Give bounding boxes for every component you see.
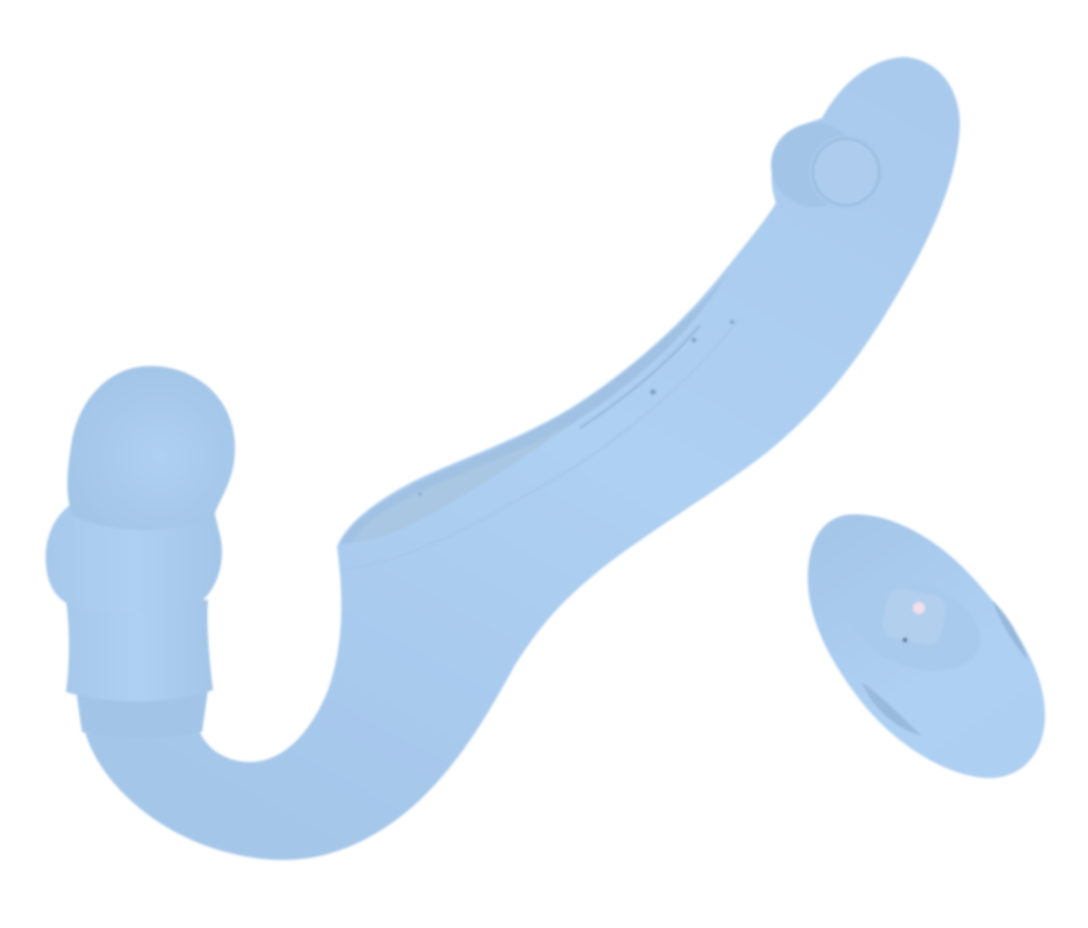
main body bbox=[85, 57, 960, 860]
ring bbox=[46, 500, 222, 614]
seam line bbox=[340, 320, 738, 570]
remote side grooves bbox=[992, 600, 1028, 660]
control dots bbox=[418, 320, 734, 496]
top channel bbox=[340, 272, 728, 545]
collar bbox=[76, 690, 208, 738]
button housing bbox=[771, 123, 859, 207]
cylinder bbox=[66, 600, 213, 702]
remote bbox=[808, 514, 1045, 778]
bulb attachment bbox=[46, 366, 235, 738]
remote button bbox=[880, 586, 949, 648]
remote dome bbox=[837, 562, 993, 688]
control panel strip bbox=[352, 422, 572, 542]
ball bbox=[67, 366, 235, 530]
button bbox=[809, 135, 883, 209]
